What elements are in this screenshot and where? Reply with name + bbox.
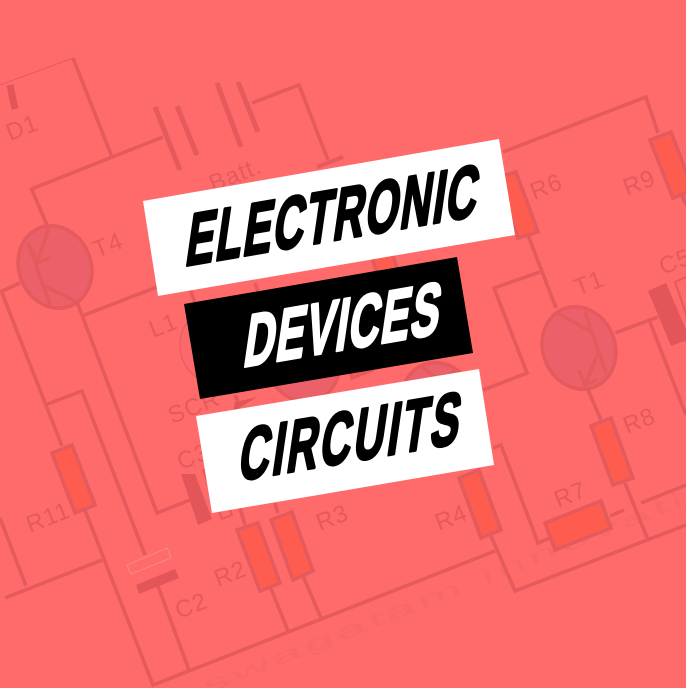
resistor hidden under banner (335, 312, 372, 378)
inductor L1 coil (180, 307, 250, 383)
diode D1 (10, 85, 15, 109)
banner background black (184, 257, 473, 399)
transistor behind title (390, 352, 486, 452)
resistor R4 (459, 470, 501, 538)
battery plates (155, 82, 258, 170)
heading DEVICES: DEVICES (240, 267, 447, 384)
heading CIRCUITS: CIRCUITS (235, 376, 467, 498)
label R6: R6 (526, 168, 567, 206)
component labels (2, 109, 686, 625)
thin wire to D1 (0, 58, 73, 85)
resistor R7 (545, 501, 611, 550)
battery terminal (317, 157, 343, 167)
label SCR: SCR (164, 385, 224, 430)
resistor R2 (237, 523, 280, 591)
label R8: R8 (619, 402, 660, 440)
label R9: R9 (619, 164, 660, 202)
resistor R6 (496, 172, 538, 238)
resistor R8 (591, 418, 633, 485)
label R7: R7 (550, 476, 591, 514)
transistor T1 (530, 296, 628, 400)
resistor R5 (366, 233, 405, 298)
label R4: R4 (431, 499, 472, 537)
banner background white (196, 369, 494, 513)
banner: ELECTRONIC (143, 139, 515, 296)
label R11: R11 (22, 497, 74, 539)
label L1: L1 (145, 308, 182, 344)
capacitor C5 (648, 277, 686, 346)
banner background white (143, 139, 515, 296)
label C3: C3 (173, 438, 214, 476)
label Batt: Batt. (205, 153, 266, 198)
capacitor C3 (181, 466, 232, 525)
resistor R9 (650, 132, 686, 198)
capacitor C2 (127, 548, 179, 594)
label T1: T1 (570, 265, 608, 302)
heading ELECTRONIC: ELECTRONIC (182, 149, 485, 283)
resistor R11 (52, 445, 95, 513)
label R2: R2 (210, 555, 251, 593)
banner: DEVICES (184, 257, 473, 399)
label T4: T4 (89, 227, 127, 264)
SCR device (233, 312, 351, 412)
label R3: R3 (312, 499, 353, 537)
label C2: C2 (171, 587, 212, 625)
resistor R3 (271, 512, 313, 580)
label D1: D1 (2, 109, 43, 147)
banner: CIRCUITS (196, 369, 494, 513)
transistor T4 (6, 215, 104, 319)
